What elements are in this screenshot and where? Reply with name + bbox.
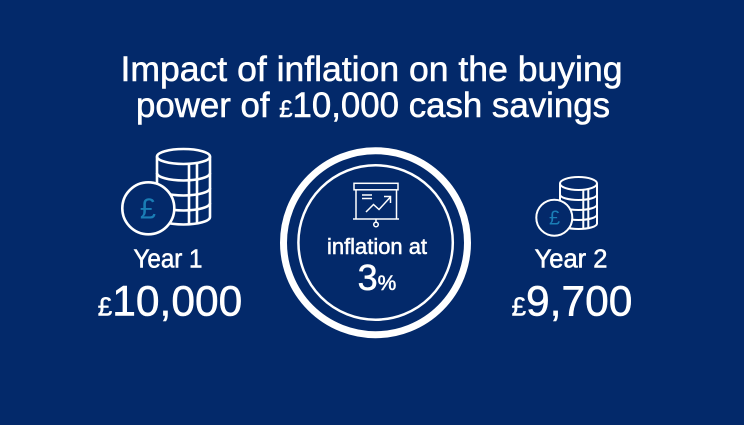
icon: presentation board with rising chart	[353, 183, 399, 227]
text: 3%: 3%	[358, 257, 396, 298]
icon: small coin stack with pound coin	[536, 177, 597, 236]
label: Year 2: Year 2	[535, 246, 607, 274]
central ring	[284, 151, 468, 335]
text: inflation at: inflation at	[327, 234, 427, 259]
title	[120, 50, 622, 125]
icon: small pound coin: £	[549, 208, 560, 230]
value: £9,700: £9,700	[512, 278, 632, 326]
title: Impact of inflation on the buying	[120, 50, 622, 89]
title: power of £10,000 cash savings	[136, 86, 610, 125]
icon: pound coin: £	[140, 194, 156, 226]
icon: large coin stack with pound coin	[122, 149, 210, 234]
label: Year 1: Year 1	[134, 246, 202, 274]
value: £10,000: £10,000	[98, 278, 242, 326]
